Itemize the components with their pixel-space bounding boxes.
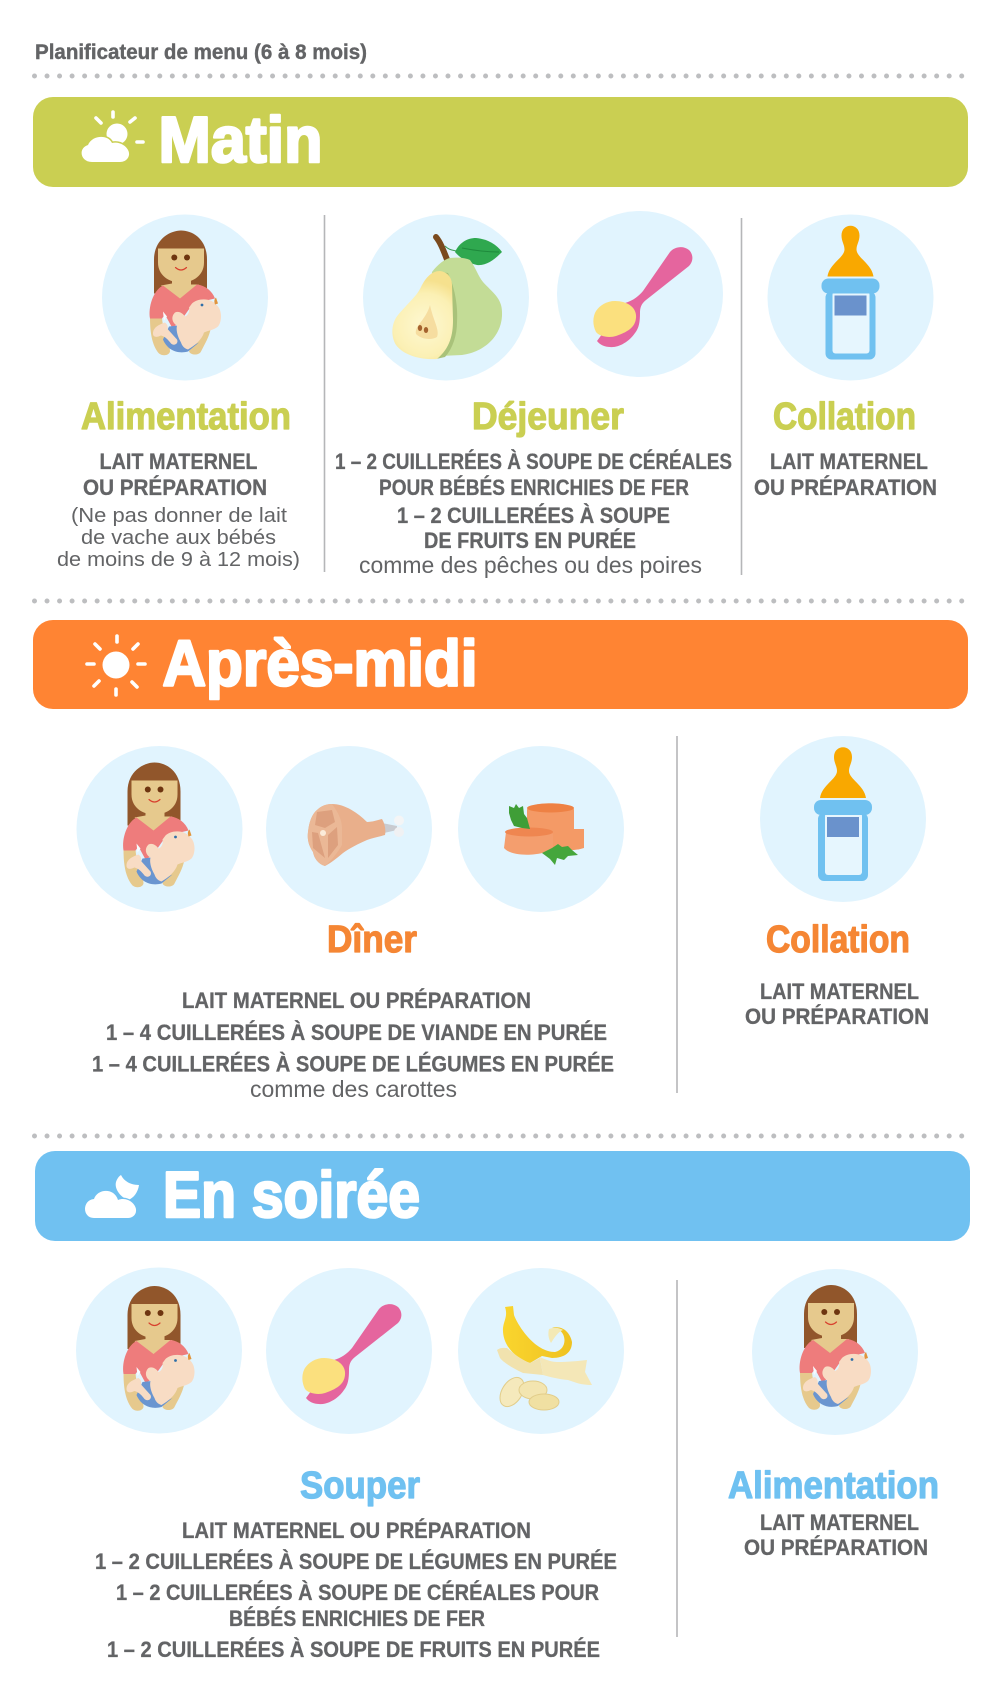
heading: apres-midi: Après-midi: [162, 626, 478, 700]
banner: apres-midi: [33, 620, 968, 709]
text block: souper: LAIT MATERNEL OU PRÉPARATION: [182, 1518, 531, 1543]
panel: en soiree: [35, 1151, 970, 1662]
text block: diner: LAIT MATERNEL OU PRÉPARATION: [182, 988, 531, 1013]
text block: diner: Dîner: [327, 919, 417, 961]
icon: sun: [87, 636, 145, 695]
heading: en soiree: En soirée: [163, 1158, 420, 1231]
text block: diner: 1 – 4 CUILLERÉES À SOUPE DE VIANDE EN PURÉE: [106, 1020, 607, 1045]
icon: cloud and rising sun: [82, 112, 143, 162]
text block: dejeuner: 1 – 2 CUILLERÉES À SOUPE: [397, 503, 670, 528]
text block: alimentation: de moins de 9 à 12 mois): [57, 548, 300, 571]
panel: matin: [33, 97, 968, 578]
text block: dejeuner: Déjeuner: [472, 396, 624, 438]
text block: diner: 1 – 4 CUILLERÉES À SOUPE DE LÉGUMES EN PURÉE: [92, 1052, 614, 1076]
text block: dejeuner: [335, 396, 732, 578]
circle: bottle: [760, 736, 926, 902]
heading: matin: Matin: [158, 103, 322, 176]
text block: alimentation: [57, 396, 300, 571]
text block: alimentation: LAIT MATERNEL: [760, 1510, 919, 1535]
text block: souper: 1 – 2 CUILLERÉES À SOUPE DE CÉRÉALES POUR: [116, 1580, 599, 1605]
text block: souper: BÉBÉS ENRICHIES DE FER: [229, 1606, 485, 1631]
text block: collation: Collation: [766, 919, 910, 961]
text block: dejeuner: POUR BÉBÉS ENRICHIES DE FER: [379, 475, 689, 500]
panel: apres-midi: [33, 620, 968, 1102]
circle: pear: [363, 214, 529, 380]
text block: alimentation: [728, 1465, 939, 1560]
circle: meat: [266, 746, 432, 912]
text block: collation: [745, 919, 929, 1029]
text block: souper: 1 – 2 CUILLERÉES À SOUPE DE LÉGUMES EN PURÉE: [95, 1549, 617, 1574]
text block: alimentation: Alimentation: [728, 1465, 939, 1507]
text block: souper: 1 – 2 CUILLERÉES À SOUPE DE FRUITS EN PURÉE: [107, 1637, 600, 1662]
banner: en soiree: [35, 1151, 970, 1241]
circle: breastfeeding mother: [76, 1268, 242, 1434]
text block: alimentation: OU PRÉPARATION: [744, 1535, 928, 1560]
text block: collation: [754, 396, 937, 500]
text block: souper: [95, 1465, 617, 1662]
text block: alimentation: (Ne pas donner de lait: [71, 504, 287, 527]
text block: collation: LAIT MATERNEL: [770, 449, 928, 474]
text block: collation: LAIT MATERNEL: [760, 979, 919, 1004]
circle: bottle: [768, 214, 934, 380]
text block: souper: Souper: [300, 1465, 420, 1507]
text block: diner: [92, 919, 614, 1102]
circle: spoon: [557, 211, 723, 377]
text block: dejeuner: DE FRUITS EN PURÉE: [424, 528, 636, 553]
circle: breastfeeding mother: [102, 214, 268, 380]
circle: breastfeeding mother: [752, 1269, 918, 1435]
text block: alimentation: LAIT MATERNEL: [100, 449, 258, 474]
text block: collation: OU PRÉPARATION: [754, 475, 937, 500]
text block: alimentation: de vache aux bébés: [81, 526, 276, 549]
icon: cloud and moon: [85, 1175, 139, 1218]
title: Planificateur de menu (6 à 8 mois): [35, 41, 367, 64]
banner: matin: [33, 97, 968, 187]
text block: dejeuner: 1 – 2 CUILLERÉES À SOUPE DE CÉRÉALES: [335, 449, 732, 474]
text block: dejeuner: comme des pêches ou des poires: [359, 552, 702, 578]
text block: alimentation: OU PRÉPARATION: [83, 475, 267, 500]
circle: carrots: [458, 746, 624, 912]
text block: collation: Collation: [773, 396, 916, 438]
circle: banana: [458, 1268, 624, 1434]
text block: alimentation: Alimentation: [81, 396, 291, 438]
circle: breastfeeding mother: [76, 746, 242, 912]
circle: spoon: [266, 1268, 432, 1434]
text block: collation: OU PRÉPARATION: [745, 1004, 929, 1029]
text block: diner: comme des carottes: [250, 1076, 457, 1102]
